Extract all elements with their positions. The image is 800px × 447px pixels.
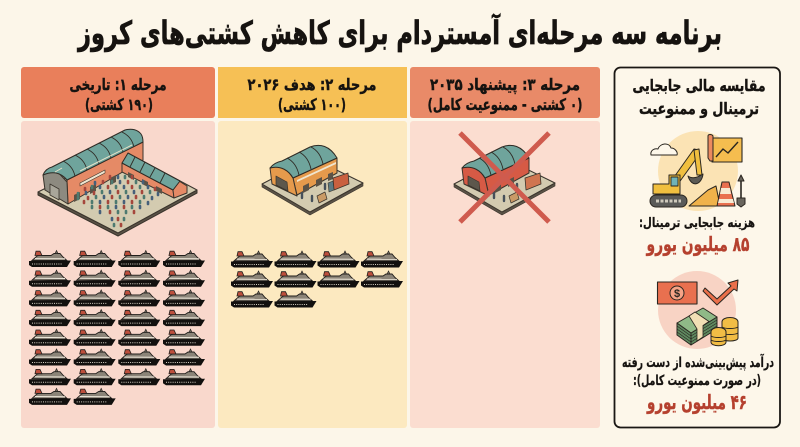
panel: financial comparison (614, 68, 780, 428)
icon: excavator and relocation cost (650, 131, 745, 211)
phase 1 header: مرحله ۱: تاریخی (70, 75, 166, 94)
phase 3 header: (۰ کشتی - ممنوعیت کامل) (428, 95, 582, 114)
icon: medium terminal (262, 145, 363, 215)
phase 2 header: (۱۰۰ کشتی) (278, 95, 346, 114)
phase 1 header: (۱۹۰ کشتی) (85, 95, 153, 114)
lost revenue label (622, 353, 774, 389)
panel: phase 3 proposal 2035 (410, 67, 600, 428)
panel: phase 1 historic (21, 67, 215, 428)
icon: money and lost revenue (658, 271, 738, 349)
panel heading: ترمینال و ممنوعیت (639, 99, 759, 118)
panel: phase 2 target 2026 (218, 67, 407, 428)
panel frame (614, 68, 780, 428)
phase 2 header: مرحله ۲: هدف ۲۰۲۶ (248, 75, 376, 94)
red cross (460, 133, 549, 222)
icon: money and lost revenue: $ (674, 288, 680, 300)
phase 1 body (21, 121, 215, 428)
phase 3 header (410, 67, 600, 118)
phase 3 body (410, 121, 600, 428)
lost revenue value: ۴۶ میلیون یورو (646, 390, 747, 414)
phase 1 header (21, 67, 215, 118)
ship grid: 190 ships (29, 250, 205, 405)
crowd (78, 176, 158, 226)
phase 2 header (218, 67, 407, 118)
relocation cost value: ۸۵ میلیون یورو (646, 232, 750, 256)
phase 2 body (218, 121, 407, 428)
icon: crossed-out terminal (454, 133, 555, 222)
panel heading (632, 76, 766, 118)
phase 3 header: مرحله ۳: پیشنهاد ۲۰۳۵ (430, 75, 580, 95)
relocation cost label: هزینه جابجایی ترمینال: (639, 216, 755, 231)
panel heading: مقایسه مالی جابجایی (632, 76, 766, 95)
icon: large terminal with crowd (38, 129, 197, 236)
ship grid: 100 ships (231, 251, 403, 308)
